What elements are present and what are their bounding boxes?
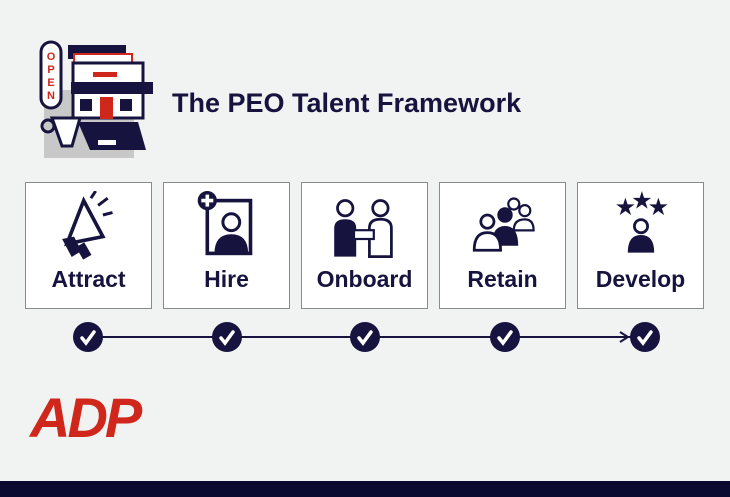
title: The PEO Talent Framework xyxy=(172,88,521,118)
panel: attract: Attract xyxy=(51,266,126,292)
panel: retain: Retain xyxy=(467,266,538,292)
icon: person with stars: ★ xyxy=(615,194,636,221)
icon: person with stars: ★ xyxy=(648,194,669,221)
icon: person with stars xyxy=(615,191,669,253)
panel: attract xyxy=(25,182,152,309)
logo: ADP: ADP xyxy=(30,386,139,449)
icon: storefront laptop xyxy=(40,40,153,158)
panel: onboard xyxy=(301,182,428,309)
icon: handshake xyxy=(334,199,393,258)
panel: develop: Develop xyxy=(596,266,685,292)
icon: hire portrait xyxy=(198,191,252,256)
icon: storefront laptop: O xyxy=(47,51,56,63)
panel: onboard: Onboard xyxy=(317,266,412,292)
icon: storefront laptop: P xyxy=(47,64,55,76)
panel: retain xyxy=(439,182,566,309)
panel: develop xyxy=(577,182,704,309)
icon: storefront laptop: E xyxy=(47,77,55,89)
icon: megaphone xyxy=(62,191,113,260)
icon: group xyxy=(472,197,535,252)
icon: storefront laptop: N xyxy=(47,90,55,102)
footer bar xyxy=(0,481,730,497)
timeline with checks xyxy=(73,322,660,352)
panel: hire xyxy=(163,182,290,309)
panel: hire: Hire xyxy=(204,266,249,292)
